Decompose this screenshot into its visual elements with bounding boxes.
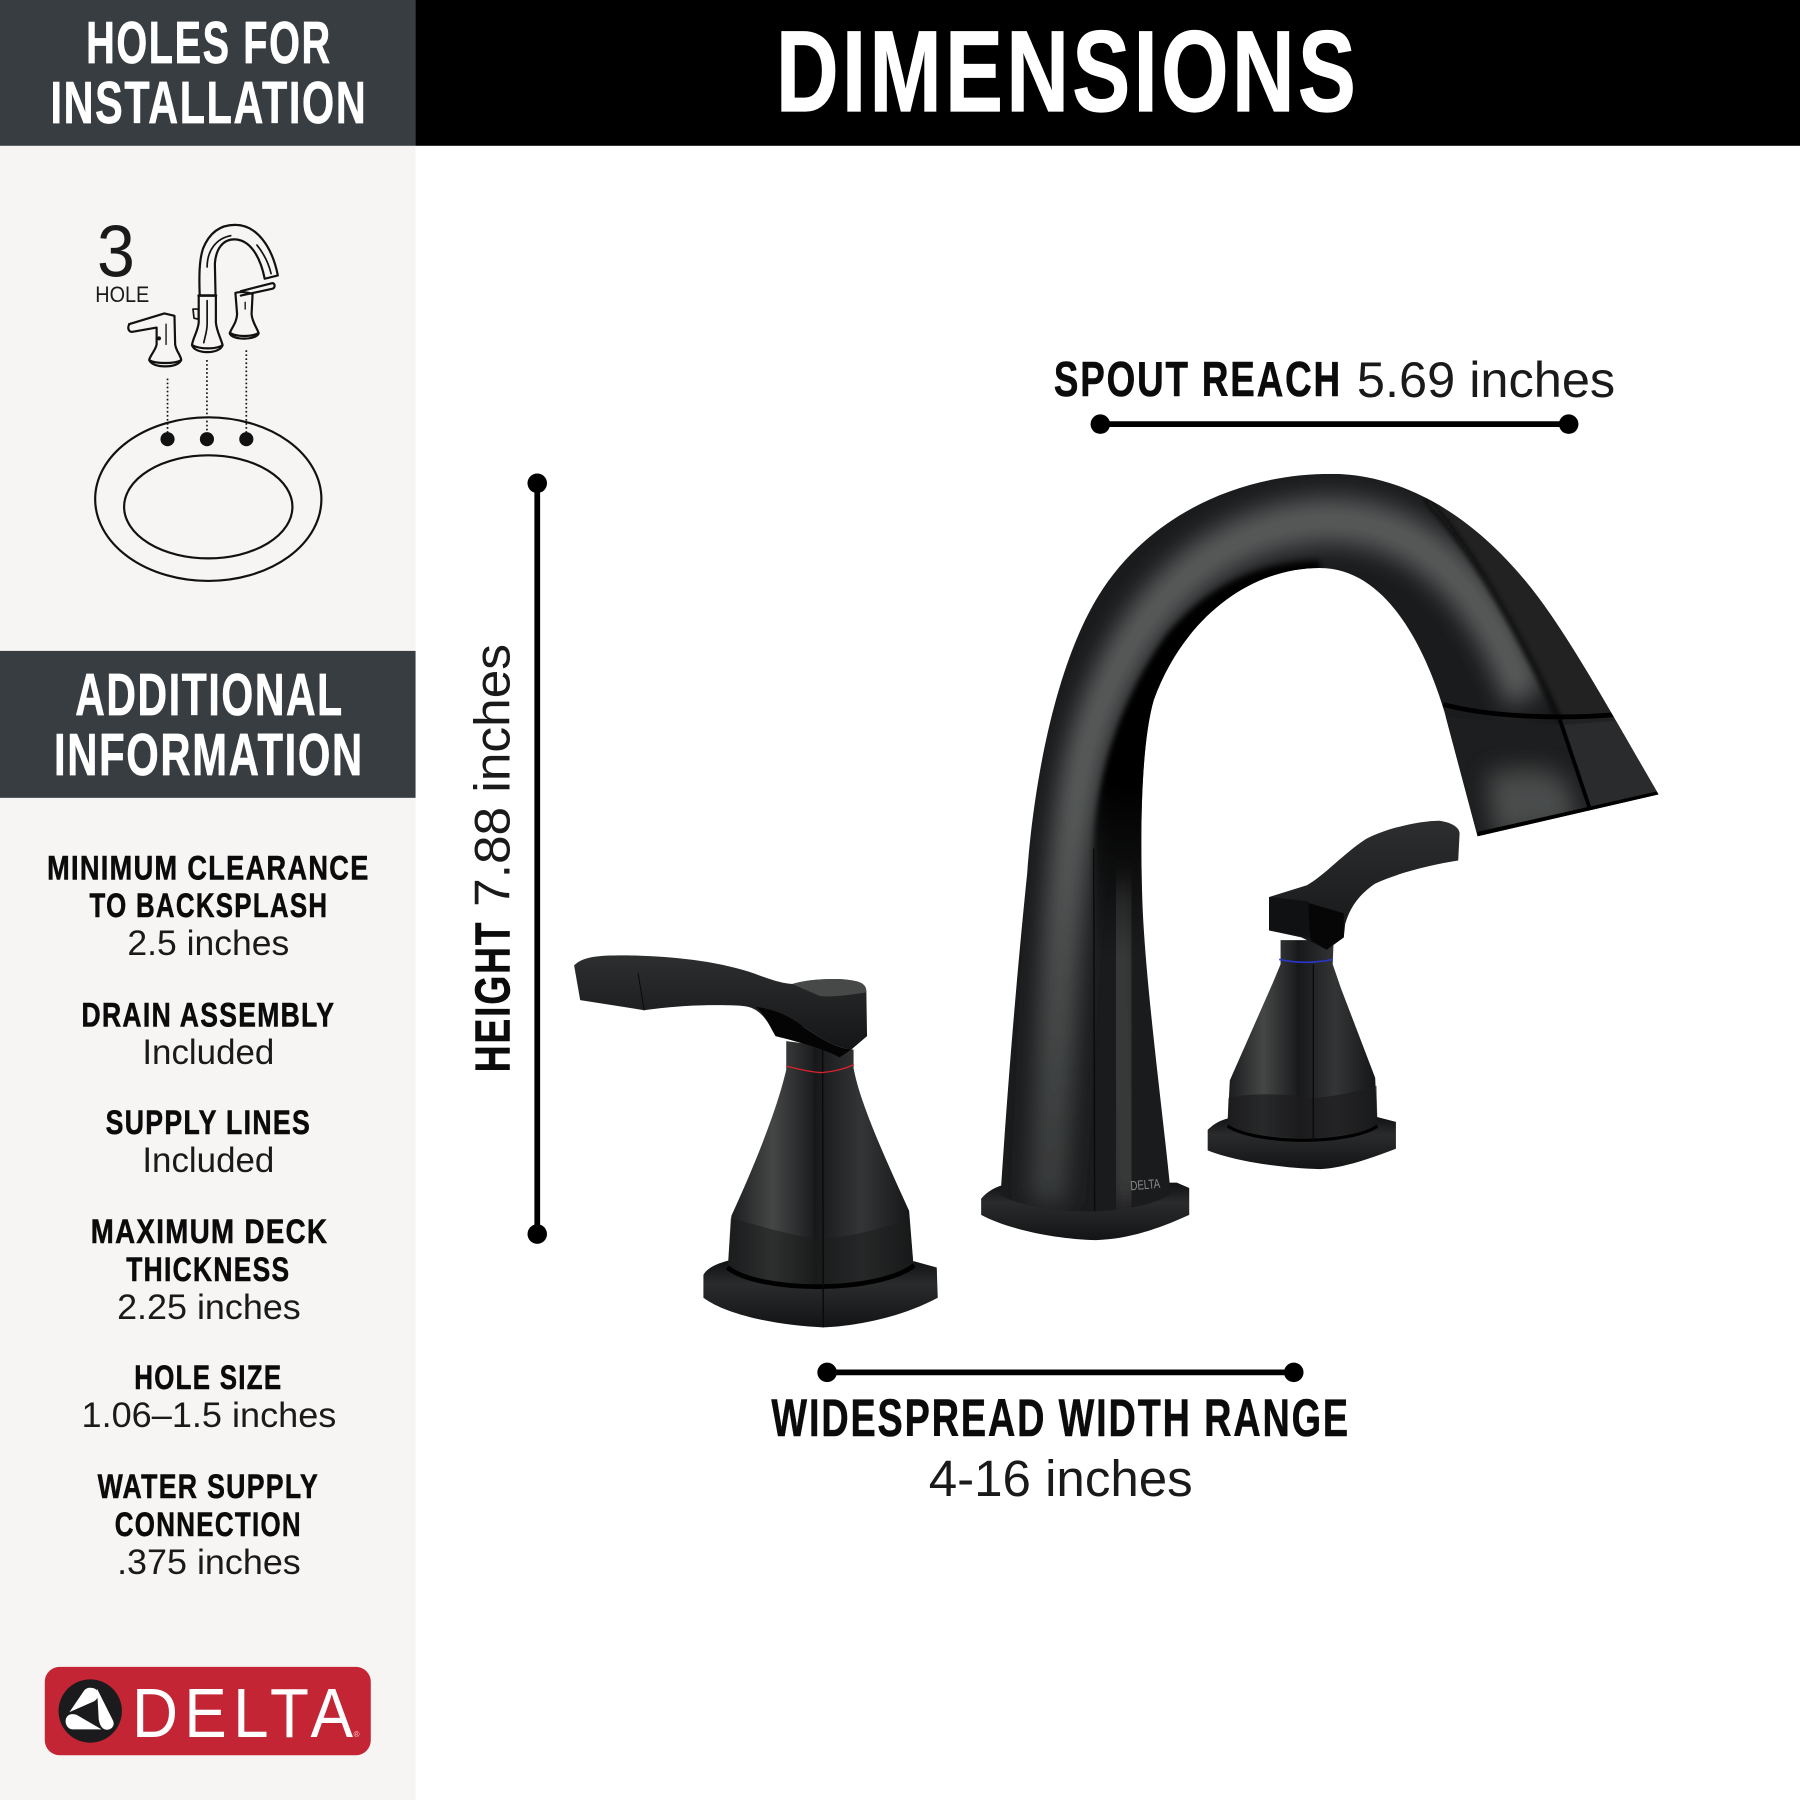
right handle base plate <box>1208 1116 1396 1169</box>
right handle lever <box>1269 821 1460 950</box>
logo: delta <box>45 1667 371 1755</box>
text block: maximum deck thickness: THICKNESS <box>126 1251 290 1289</box>
logo: delta: DELTA <box>132 1674 359 1752</box>
faucet: left handle <box>574 955 938 1327</box>
heading: holes for installation: INSTALLATION <box>51 69 367 136</box>
icon: three hole faucet and sink diagram: HOLE <box>95 282 149 307</box>
dimension: spout reach: 5.69 inches <box>1357 351 1615 408</box>
text block: minimum clearance to backsplash <box>47 849 370 963</box>
title: dimensions: DIMENSIONS <box>776 8 1359 136</box>
icon: three hole faucet and sink diagram <box>95 210 321 581</box>
right handle lower part <box>1208 940 1396 1169</box>
heading: additional information: INFORMATION <box>54 721 364 788</box>
text block: hole size: HOLE SIZE <box>134 1359 282 1397</box>
right handle body <box>1228 940 1377 1138</box>
text block: drain assembly <box>82 996 335 1072</box>
text block: water supply connection: CONNECTION <box>115 1506 302 1544</box>
text block: supply lines: SUPPLY LINES <box>106 1104 311 1142</box>
heading: holes for installation <box>0 0 416 146</box>
dimension: spout reach: SPOUT REACH <box>1054 352 1342 407</box>
heading: additional information <box>0 651 416 798</box>
text block: hole size <box>82 1359 336 1435</box>
text block: hole size: 1.06–1.5 inches <box>82 1395 336 1435</box>
dimension: height: 7.88 inches <box>464 644 521 907</box>
heading: holes for installation: HOLES FOR <box>86 9 332 76</box>
faucet: spout and right handle <box>981 462 1670 1240</box>
text block: water supply connection <box>98 1468 319 1582</box>
text block: drain assembly: Included <box>142 1032 274 1072</box>
panel: left sidebar background <box>0 146 416 1800</box>
faucet logo mark: DELTA <box>1130 1176 1161 1193</box>
text block: maximum deck thickness: MAXIMUM DECK <box>91 1213 328 1251</box>
text block: supply lines: Included <box>142 1140 274 1180</box>
logo: delta: ® <box>354 1730 360 1739</box>
text block: minimum clearance to backsplash: 2.5 inches <box>127 923 289 963</box>
spout body <box>988 462 1670 1225</box>
icon: three hole faucet and sink diagram: 3 <box>97 210 135 293</box>
title: dimensions <box>416 0 1800 146</box>
text block: maximum deck thickness: 2.25 inches <box>117 1287 301 1327</box>
text block: maximum deck thickness <box>91 1213 328 1327</box>
left handle body <box>728 1041 914 1285</box>
text block: minimum clearance to backsplash: MINIMUM CLEARANCE <box>47 849 370 887</box>
left handle base plate <box>703 1261 938 1327</box>
dimension: widespread width range <box>771 1363 1350 1507</box>
spout base plate <box>981 1183 1189 1240</box>
left handle lever <box>574 955 867 1050</box>
text block: supply lines <box>106 1104 311 1180</box>
text block: water supply connection: .375 inches <box>117 1542 301 1582</box>
heading: additional information: ADDITIONAL <box>75 661 344 728</box>
dimension: widespread width range: 4-16 inches <box>929 1450 1193 1507</box>
text block: water supply connection: WATER SUPPLY <box>98 1468 319 1506</box>
text block: drain assembly: DRAIN ASSEMBLY <box>82 996 335 1034</box>
dimension: widespread width range: WIDESPREAD WIDTH RANGE <box>771 1389 1350 1448</box>
dimension: height <box>464 474 547 1244</box>
dimension: spout reach <box>1054 351 1615 434</box>
dimension: height: HEIGHT <box>466 921 521 1072</box>
text block: minimum clearance to backsplash: TO BACKSPLASH <box>90 887 328 925</box>
